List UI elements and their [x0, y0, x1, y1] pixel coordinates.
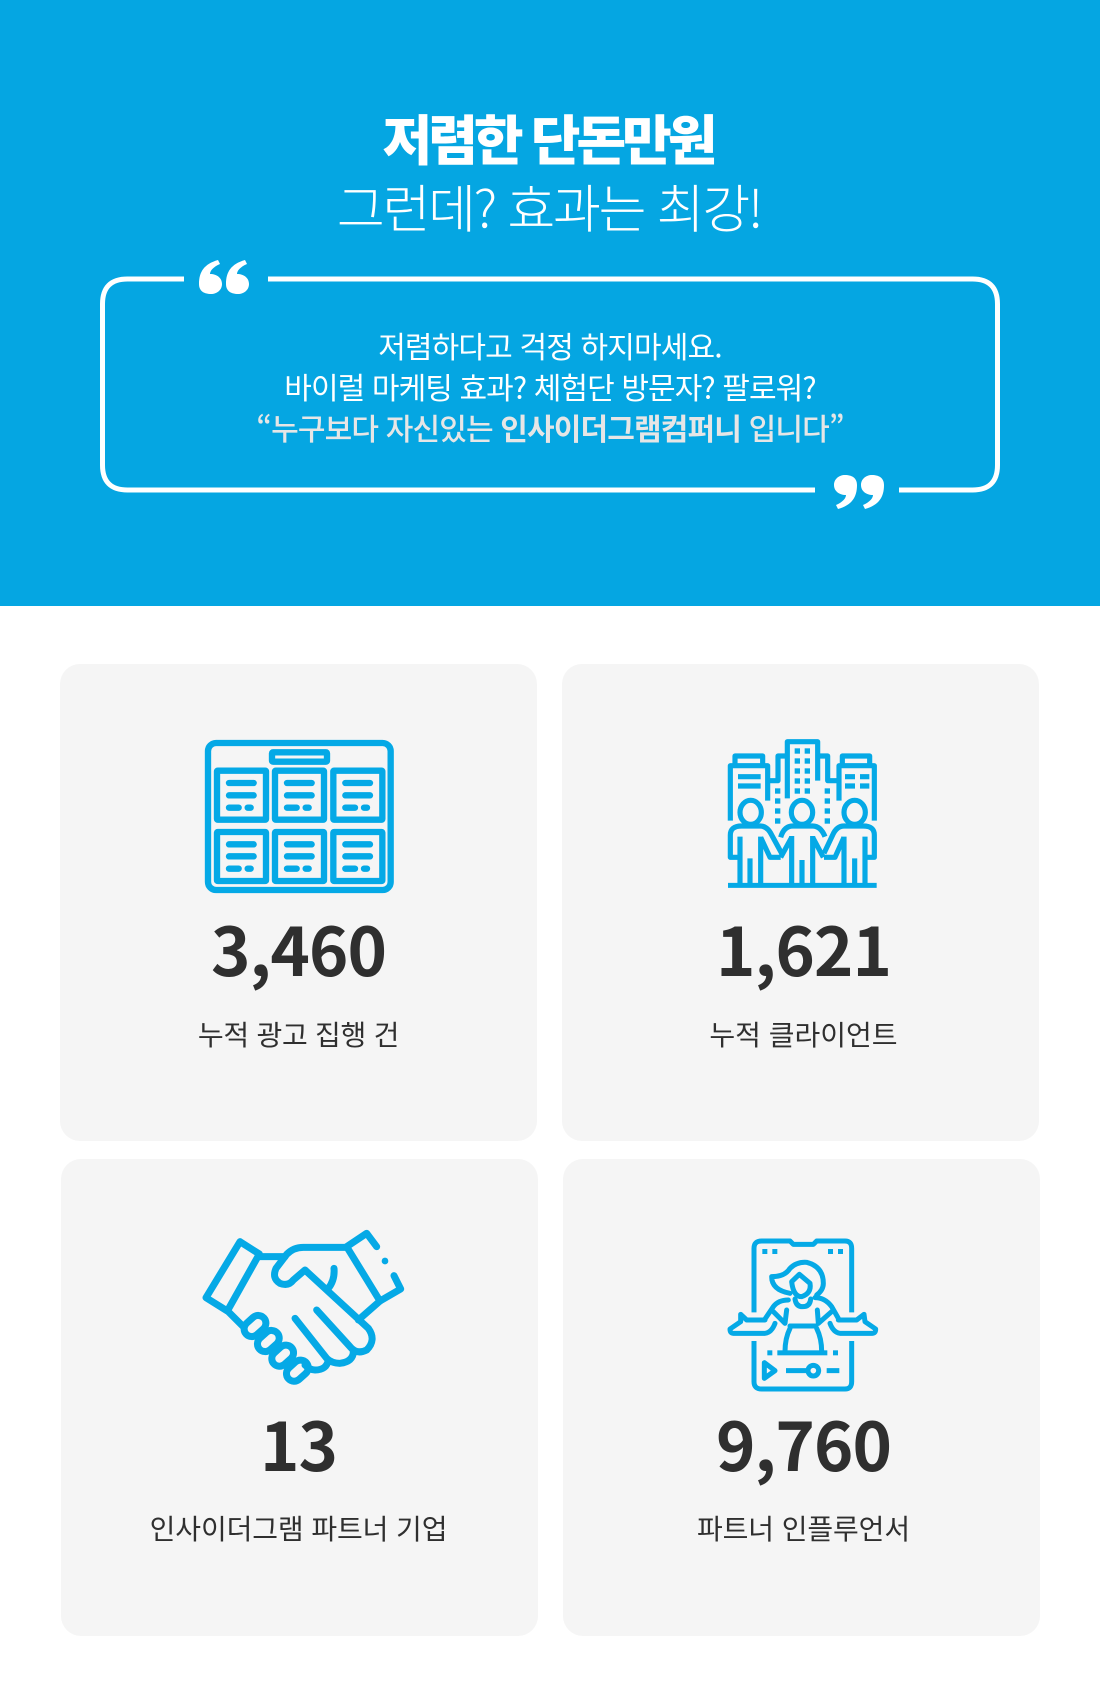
- number: 9,760: [716, 1394, 891, 1490]
- panel: blue header: [0, 0, 1100, 606]
- label: 누적 클라이언트: [709, 1014, 898, 1054]
- icon: handshake: [202, 1230, 404, 1385]
- number: 1,621: [716, 898, 891, 996]
- icon: opening quote mark: [199, 260, 249, 294]
- label: 파트너 인플루언서: [697, 1508, 910, 1548]
- panel: partner companies: [61, 1158, 538, 1636]
- icon: closing quote mark: [834, 475, 884, 509]
- panel: clients: [562, 664, 1039, 1141]
- quote text line 2: 바이럴 마케팅 효과? 체험단 방문자? 팔로워?: [284, 364, 816, 408]
- number: 13: [260, 1394, 337, 1490]
- quote text line 1: 저렴하다고 걱정 하지마세요.: [378, 323, 722, 367]
- number: 3,460: [211, 898, 386, 996]
- panel: ad count: [60, 664, 537, 1141]
- icon: ad board: [204, 740, 394, 894]
- label: 누적 광고 집행 건: [198, 1014, 399, 1054]
- label: 인사이더그램 파트너 기업: [150, 1508, 447, 1548]
- panel: influencers: [563, 1158, 1040, 1636]
- icon: people and buildings: [728, 739, 877, 888]
- quote frame: [100, 260, 1000, 509]
- quote text line 3: “누구보다 자신있는 인사이더그램컴퍼니 입니다”: [256, 405, 844, 449]
- subtitle: 그런데? 효과는 최강!: [337, 168, 761, 243]
- icon: influencer phone: [728, 1238, 878, 1392]
- title: 저렴한 단돈만원: [383, 97, 713, 176]
